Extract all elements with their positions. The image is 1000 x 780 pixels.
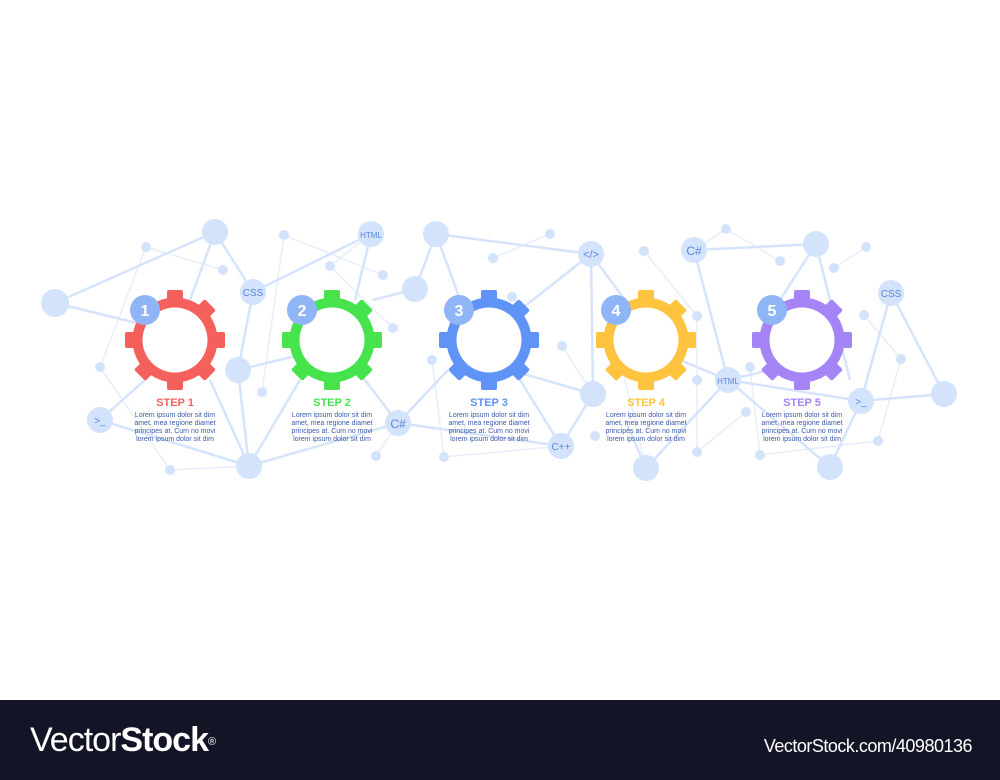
- badge 4: 4: [612, 303, 621, 320]
- step 2 text: [291, 397, 373, 443]
- step 4 text: STEP 4: [627, 397, 666, 409]
- step 2 text: principes at. Cum no movi: [292, 428, 373, 435]
- network background: C++: [552, 442, 571, 453]
- step 5: [752, 290, 852, 443]
- step 5 text: principes at. Cum no movi: [762, 428, 843, 435]
- step 2: [282, 290, 382, 443]
- step 2 text: STEP 2: [313, 397, 351, 409]
- network background: HTML: [360, 231, 382, 240]
- network background: >_: [94, 416, 106, 427]
- step 1 text: lorem ipsum dolor sit dim: [136, 436, 214, 443]
- step 3 text: principes at. Cum no movi: [449, 428, 530, 435]
- network background: CSS: [243, 288, 264, 299]
- step 5 text: [761, 397, 843, 443]
- step 5 text: amet, mea regione diamet: [761, 420, 843, 427]
- network background: [41, 219, 957, 481]
- step 4: [596, 290, 696, 443]
- step 4 text: amet, mea regione diamet: [605, 420, 687, 427]
- step 3 text: lorem ipsum dolor sit dim: [450, 436, 528, 443]
- step 2 text: lorem ipsum dolor sit dim: [293, 436, 371, 443]
- badge 5: [757, 295, 787, 325]
- step 5 text: STEP 5: [783, 397, 821, 409]
- step 1 text: [134, 397, 216, 443]
- network background: </>: [583, 249, 599, 261]
- footer url: VectorStock.com/40980136: [764, 736, 972, 756]
- step 5 text: lorem ipsum dolor sit dim: [763, 436, 841, 443]
- step 1 text: STEP 1: [156, 397, 194, 409]
- badge 1: 1: [141, 303, 150, 320]
- step 1 text: principes at. Cum no movi: [135, 428, 216, 435]
- badge 5: 5: [768, 303, 777, 320]
- badge 2: [287, 295, 317, 325]
- step 1: [125, 290, 225, 443]
- badge 3: [444, 295, 474, 325]
- step 1 text: amet, mea regione diamet: [134, 420, 216, 427]
- step 3 text: amet, mea regione diamet: [448, 420, 530, 427]
- step 1 text: Lorem ipsum dolor sit dim: [135, 412, 215, 419]
- step 3 text: STEP 3: [470, 397, 508, 409]
- step 5 text: Lorem ipsum dolor sit dim: [762, 412, 842, 419]
- step 4 text: [605, 397, 687, 443]
- step 3: [439, 290, 539, 443]
- step 3 text: Lorem ipsum dolor sit dim: [449, 412, 529, 419]
- step 2 text: amet, mea regione diamet: [291, 420, 373, 427]
- network background: HTML: [717, 377, 739, 386]
- step 4 text: Lorem ipsum dolor sit dim: [606, 412, 686, 419]
- network background: C#: [390, 417, 406, 431]
- badge 4: [601, 295, 631, 325]
- footer logo: VectorStock®: [30, 721, 215, 759]
- badge 3: 3: [455, 303, 464, 320]
- step 4 text: principes at. Cum no movi: [606, 428, 687, 435]
- network background: >_: [855, 397, 867, 408]
- step 2 text: Lorem ipsum dolor sit dim: [292, 412, 372, 419]
- footer bar: [0, 700, 1000, 780]
- step 3 text: [448, 397, 530, 443]
- network background: C#: [686, 244, 702, 258]
- network background: CSS: [881, 289, 902, 300]
- badge 1: [130, 295, 160, 325]
- badge 2: 2: [298, 303, 307, 320]
- step 4 text: lorem ipsum dolor sit dim: [607, 436, 685, 443]
